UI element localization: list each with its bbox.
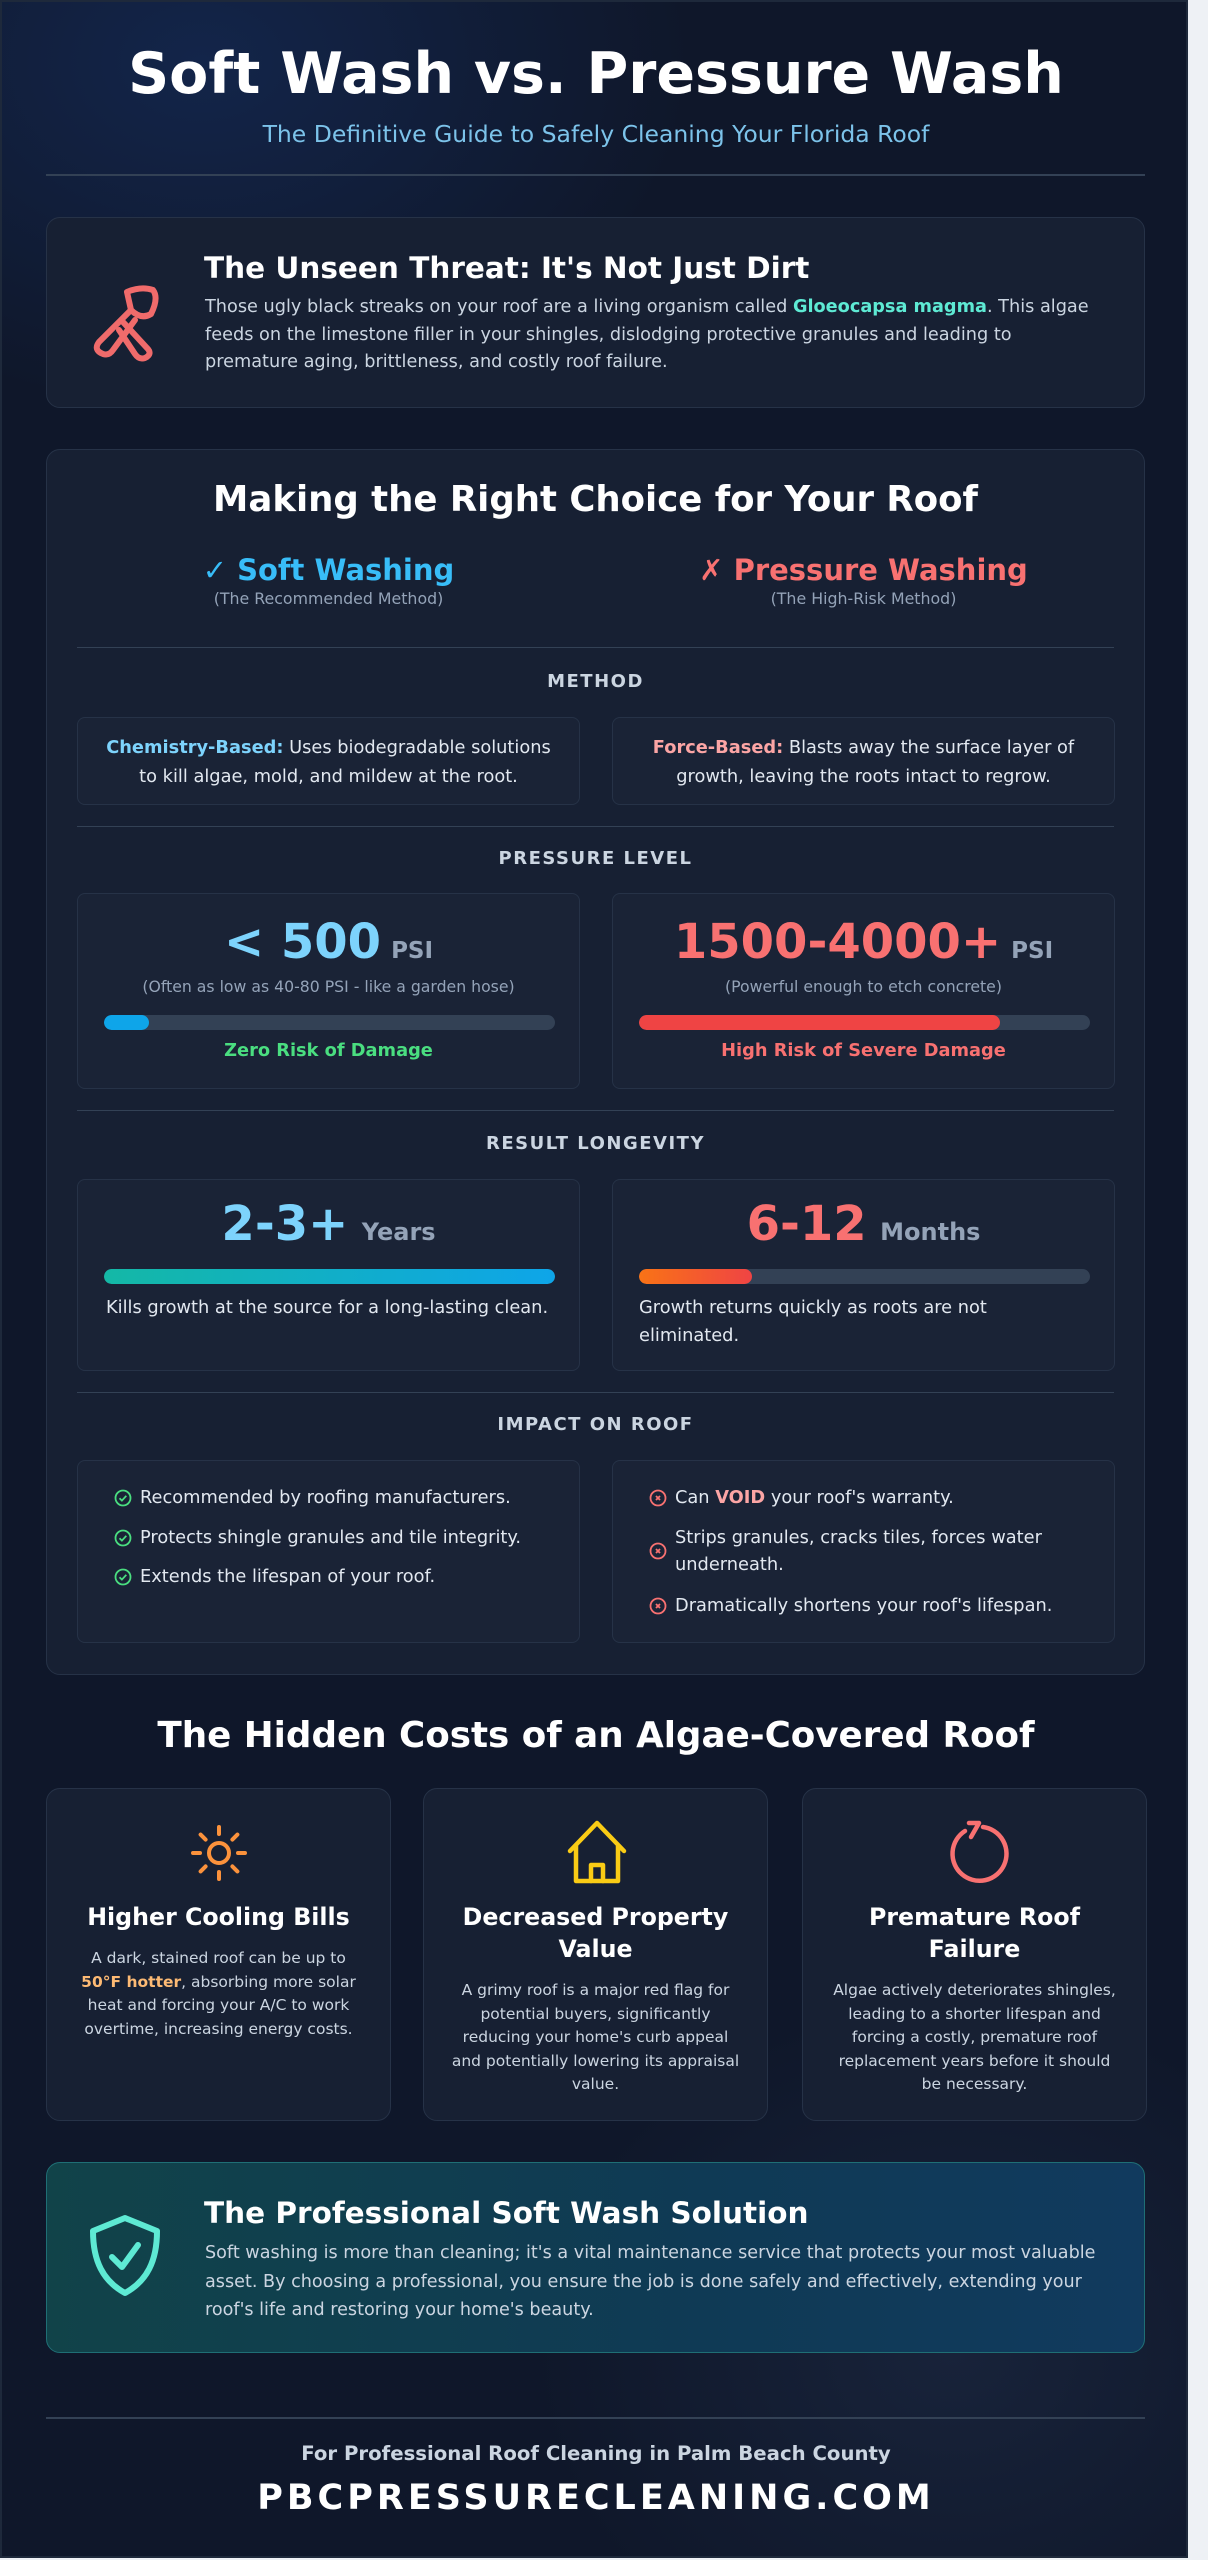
box: soft method: to kill algae, mold, and mildew at the root. — [139, 766, 518, 787]
box: soft pressure: Zero Risk of Damage — [224, 1040, 433, 1061]
section: impact on roof: IMPACT ON ROOF — [497, 1414, 694, 1435]
card: cooling bills: 50°F hotter, absorbing more solar — [81, 1973, 356, 1991]
card: property value: and potentially lowering its appraisal — [452, 2052, 739, 2070]
item: underneath. — [675, 1554, 784, 1575]
card: roof failure: forcing a costly, premature roof — [852, 2028, 1097, 2046]
text block — [205, 2243, 1095, 2320]
box: soft pressure: < 500 PSI — [224, 914, 433, 970]
item: Recommended by roofing manufacturers. — [140, 1487, 511, 1508]
card: property value: A grimy roof is a major red flag for — [462, 1981, 729, 1999]
icon: house — [568, 1820, 626, 1884]
bar: pressure longevity — [639, 1269, 1090, 1284]
box: pressure longevity: eliminated. — [639, 1325, 739, 1346]
box: high pressure: High Risk of Severe Damage — [721, 1040, 1006, 1061]
card: property value: reducing your home's curb appeal — [463, 2028, 728, 2046]
card: roof failure: Failure — [929, 1935, 1020, 1963]
card: property value: value. — [572, 2075, 619, 2093]
bar: high pressure — [639, 1015, 1090, 1030]
title: Soft Wash vs. Pressure Wash — [128, 41, 1064, 107]
card: cooling bills: A dark, stained roof can be up to — [91, 1949, 346, 1967]
card: cooling bills: heat and forcing your A/C to work — [88, 1996, 349, 2014]
box: soft method — [77, 717, 580, 805]
box: pressure longevity: Growth returns quickly as roots are not — [639, 1297, 987, 1318]
icon: refresh circle — [950, 1820, 1009, 1883]
card: property value: Decreased Property — [463, 1903, 728, 1931]
column header: pressure washing: (The High-Risk Method) — [771, 589, 956, 608]
text block: asset. By choosing a professional, you ensure the job is done safely and effectively, extending your — [205, 2272, 1082, 2292]
section: method: METHOD — [547, 671, 644, 692]
box: soft longevity — [77, 1179, 580, 1371]
box: pressure method: growth, leaving the roots intact to regrow. — [676, 766, 1051, 787]
column header: soft washing: ✓ Soft Washing — [203, 553, 454, 587]
column header: pressure washing: ✗ Pressure Washing — [699, 553, 1028, 587]
box: soft pressure: (Often as low as 40-80 PSI - like a garden hose) — [142, 977, 515, 996]
box: pressure impact list — [612, 1460, 1115, 1643]
text block — [204, 297, 1089, 372]
box: pressure method — [612, 717, 1115, 805]
box: soft longevity: Kills growth at the source for a long-lasting clean. — [106, 1297, 548, 1318]
panel: solution — [46, 2162, 1145, 2353]
footer url: PBCPRESSURECLEANING.COM — [257, 2478, 935, 2518]
box: soft longevity: 2-3+ Years — [221, 1196, 436, 1252]
icon: shield check — [90, 2215, 160, 2296]
item: Extends the lifespan of your roof. — [140, 1566, 435, 1587]
icon: bacteria — [94, 285, 159, 362]
card: roof failure: be necessary. — [922, 2075, 1027, 2093]
item — [650, 1527, 1042, 1575]
box: soft method: Chemistry-Based: Uses biodegradable solutions — [106, 737, 551, 758]
item: Strips granules, cracks tiles, forces water — [675, 1527, 1042, 1548]
text block: premature aging, brittleness, and costly roof failure. — [205, 352, 668, 372]
column header: pressure washing — [699, 553, 1028, 608]
bar: soft pressure — [104, 1015, 555, 1030]
card: roof failure: Algae actively deteriorates shingles, — [833, 1981, 1116, 1999]
text block: Soft washing is more than cleaning; it's a vital maintenance service that protects your most valuable — [205, 2243, 1095, 2263]
heading: comparison: Making the Right Choice for Your Roof — [213, 479, 978, 520]
box: high pressure: (Powerful enough to etch concrete) — [725, 977, 1002, 996]
subtitle: The Definitive Guide to Safely Cleaning Your Florida Roof — [263, 120, 929, 148]
panel: comparison — [46, 449, 1145, 1675]
card: property value: potential buyers, significantly — [480, 2005, 711, 2023]
heading: hidden costs: The Hidden Costs of an Algae-Covered Roof — [157, 1715, 1035, 1756]
text block: roof's life and restoring your home's beauty. — [205, 2300, 594, 2320]
section: pressure level: PRESSURE LEVEL — [499, 848, 692, 869]
column header: soft washing: (The Recommended Method) — [214, 589, 443, 608]
box: pressure longevity — [612, 1179, 1115, 1371]
box: soft pressure — [77, 893, 580, 1089]
text block: feeds on the limestone filler in your shingles, dislodging protective granules and leading to — [205, 325, 1012, 345]
card: roof failure: Premature Roof — [869, 1903, 1080, 1931]
heading: The Professional Soft Wash Solution — [204, 2196, 809, 2230]
box: high pressure — [612, 893, 1115, 1089]
bar: soft longevity — [104, 1269, 555, 1284]
card: roof failure — [802, 1788, 1147, 2121]
card: roof failure: leading to a shorter lifespan and — [848, 2005, 1101, 2023]
card: cooling bills: overtime, increasing energy costs. — [84, 2020, 353, 2038]
footer tagline: For Professional Roof Cleaning in Palm Beach County — [301, 2442, 891, 2465]
item: Dramatically shortens your roof's lifespan. — [675, 1595, 1052, 1616]
box: high pressure: 1500-4000+ PSI — [674, 914, 1053, 970]
item: Can VOID your roof's warranty. — [675, 1487, 954, 1508]
heading: The Unseen Threat: It's Not Just Dirt — [204, 251, 809, 285]
text block: Those ugly black streaks on your roof are a living organism called Gloeocapsa magma. This algae — [205, 297, 1089, 317]
card: property value: Value — [558, 1935, 633, 1963]
column header: soft washing — [203, 553, 454, 608]
section: result longevity: RESULT LONGEVITY — [486, 1133, 705, 1154]
item: Protects shingle granules and tile integrity. — [140, 1527, 521, 1548]
panel: unseen threat — [46, 217, 1145, 408]
card: cooling bills: Higher Cooling Bills — [87, 1903, 350, 1931]
card: cooling bills — [46, 1788, 391, 2121]
box: soft impact list — [77, 1460, 580, 1643]
box: pressure method: Force-Based: Blasts away the surface layer of — [653, 737, 1074, 758]
icon: sun — [191, 1825, 247, 1881]
box: pressure longevity: 6-12 Months — [747, 1196, 980, 1252]
card: property value — [423, 1788, 768, 2121]
card: roof failure: replacement years before it should — [839, 2052, 1110, 2070]
